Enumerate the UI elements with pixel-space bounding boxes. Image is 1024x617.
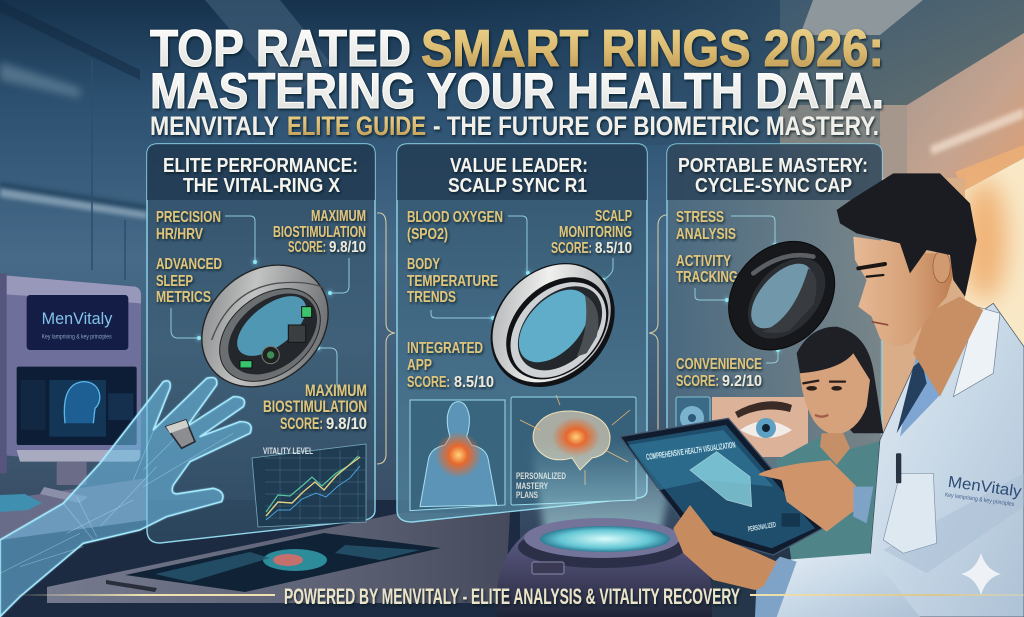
holographic pedestal xyxy=(497,440,712,617)
score: maximum biostimulation lower: BIOSTIMULATION xyxy=(263,397,367,416)
panel: portable mastery xyxy=(667,144,882,500)
feature: body temperature trends xyxy=(407,256,498,306)
collar xyxy=(953,307,1000,397)
score: maximum biostimulation lower: MAXIMUM xyxy=(305,381,367,400)
card caption xyxy=(516,471,566,501)
screen: brain scan xyxy=(17,367,137,445)
feature: precision hr/hrv: PRECISION xyxy=(156,209,221,226)
score: maximum biostimulation top: SCORE: xyxy=(288,239,326,256)
score: maximum biostimulation top xyxy=(273,208,366,256)
icon: sparkle watermark xyxy=(961,553,1001,595)
connector lines xyxy=(171,216,349,388)
score: maximum biostimulation top: 9.8/10 xyxy=(329,239,366,256)
feature: advanced sleep metrics: METRICS xyxy=(156,289,211,306)
screen: brand panel xyxy=(27,295,128,350)
desk tablet with brain image xyxy=(125,533,441,592)
heading: vital-ring x: THE VITAL-RING X xyxy=(183,175,341,197)
connector lines xyxy=(431,216,613,318)
score: scalp monitoring: MONITORING xyxy=(559,224,632,241)
hair xyxy=(837,173,977,297)
feature: advanced sleep metrics: ADVANCED xyxy=(156,256,222,273)
holding hand xyxy=(673,505,777,590)
subtitle: ELITE GUIDE xyxy=(287,111,426,141)
score: integrated app: SCORE: xyxy=(407,374,450,391)
left computer monitor with MenVitaly screen xyxy=(0,273,141,485)
score: maximum biostimulation lower: 9.8/10 xyxy=(326,414,367,433)
score: maximum biostimulation lower: SCORE: xyxy=(280,414,323,433)
subtitle: - THE FUTURE OF BIOMETRIC MASTERY. xyxy=(433,111,879,141)
chart: vitality level xyxy=(252,444,366,527)
score: scalp monitoring: SCALP xyxy=(595,208,632,225)
doctor in white coat xyxy=(755,173,1024,617)
bracket connecting panels two and three xyxy=(649,215,667,490)
connector dots xyxy=(725,243,780,352)
score: scalp monitoring: SCORE: xyxy=(551,240,592,257)
smart ring: vital-ring x xyxy=(177,240,353,412)
feature: body temperature trends: TRENDS xyxy=(407,289,456,306)
hand-held tablet: COMPREHENSIVE HEALTH VISUALIZATION xyxy=(646,440,736,462)
panel: elite performance xyxy=(147,144,375,543)
rear desk behind monitor xyxy=(0,478,147,540)
heading: scalp sync r1: SCALP SYNC R1 xyxy=(448,175,587,197)
heading: cycle-sync cap: PORTABLE MASTERY: xyxy=(678,155,868,177)
score: convenience: 9.2/10 xyxy=(722,373,762,390)
score: maximum biostimulation top: MAXIMUM xyxy=(311,208,366,225)
score: maximum biostimulation top: BIOSTIMULATION xyxy=(273,224,366,241)
panel: value leader xyxy=(397,144,647,522)
score: integrated app: APP xyxy=(407,357,432,374)
connector dots xyxy=(197,260,332,350)
bracket connecting panels one and two xyxy=(377,213,395,464)
feature: blood oxygen xyxy=(407,209,503,243)
ring on finger xyxy=(166,420,195,448)
score: integrated app xyxy=(407,340,494,391)
logo on coat sleeve: MenVitaly xyxy=(947,474,1023,501)
heading: cycle-sync cap: CYCLE-SYNC CAP xyxy=(695,175,852,197)
smart ring: scalp sync r1 xyxy=(465,238,640,412)
score: scalp monitoring: 8.5/10 xyxy=(595,240,632,257)
title: SMART RINGS 2026: xyxy=(421,20,884,78)
feature: body temperature trends: TEMPERATURE xyxy=(407,273,498,290)
subtitle xyxy=(150,111,879,141)
hand-held tablet: PERSONALIZED xyxy=(747,520,777,534)
subtitle: MENVITALY xyxy=(150,111,279,141)
card caption: PERSONALIZED xyxy=(516,471,566,482)
lab coat xyxy=(755,303,1024,617)
screen: brand panel: Key lamprising & key principles xyxy=(42,333,112,340)
feature: advanced sleep metrics: SLEEP xyxy=(156,273,193,290)
desk with side tablet xyxy=(47,513,510,603)
feature: precision hr/hrv: HR/HRV xyxy=(156,226,203,243)
hologram hand wearing ring xyxy=(0,377,251,617)
feature: blood oxygen: BLOOD OXYGEN xyxy=(407,209,503,226)
feature: activity tracking: ACTIVITY xyxy=(676,253,731,270)
heading: scalp sync r1: VALUE LEADER: xyxy=(450,155,588,177)
neck and face xyxy=(853,237,983,397)
pointing hand xyxy=(758,460,857,532)
screen: brand panel: MenVitaly xyxy=(42,309,113,328)
score: maximum biostimulation lower xyxy=(263,381,367,433)
title: MASTERING YOUR HEALTH DATA. xyxy=(150,63,884,119)
feature: activity tracking: TRACKING xyxy=(676,269,738,286)
heading: cycle-sync cap xyxy=(678,155,868,197)
feature: precision hr/hrv xyxy=(156,209,221,243)
score: integrated app: INTEGRATED xyxy=(407,340,483,357)
doctor's hands xyxy=(673,460,873,590)
score: scalp monitoring xyxy=(551,208,632,257)
feature: stress analysis xyxy=(676,209,736,243)
lower room shadow xyxy=(0,500,520,617)
footer: gold lines and powered-by text: POWERED BY MENVITALY - ELITE ANALYSIS & VITALITY RECOVERY xyxy=(284,584,740,609)
feature: stress analysis: STRESS xyxy=(676,209,724,226)
image card: eye scan xyxy=(676,397,808,457)
feature: blood oxygen: (SPO2) xyxy=(407,226,448,243)
card caption: PLANS xyxy=(516,490,538,501)
connector lines xyxy=(695,216,778,363)
logo on coat sleeve xyxy=(944,474,1023,509)
heading: scalp sync r1 xyxy=(448,155,588,197)
heading: vital-ring x: ELITE PERFORMANCE: xyxy=(163,155,358,177)
score: integrated app: 8.5/10 xyxy=(454,374,494,391)
score: convenience: SCORE: xyxy=(676,373,719,390)
title xyxy=(150,20,884,119)
chart: vitality level: VITALITY LEVEL xyxy=(263,446,313,456)
feature: advanced sleep metrics xyxy=(156,256,222,306)
image card: human body heart xyxy=(410,400,505,511)
heading: vital-ring x xyxy=(163,155,358,197)
shirt and tie xyxy=(897,307,977,437)
smart ring: cycle-sync cap xyxy=(707,220,857,371)
image card: brain with personalized plans xyxy=(511,395,636,505)
score: convenience: CONVENIENCE xyxy=(676,356,762,373)
woman in teal scrubs xyxy=(777,327,907,573)
right wall and ceiling xyxy=(640,0,1024,440)
feature: activity tracking xyxy=(676,253,738,286)
connector dots xyxy=(491,271,605,320)
feature: stress analysis: ANALYSIS xyxy=(676,226,736,243)
title: TOP RATED xyxy=(150,20,411,78)
card caption: MASTERY xyxy=(516,481,548,492)
feature: body temperature trends: BODY xyxy=(407,256,440,273)
score: convenience xyxy=(676,356,762,390)
hand-held tablet xyxy=(620,418,823,555)
